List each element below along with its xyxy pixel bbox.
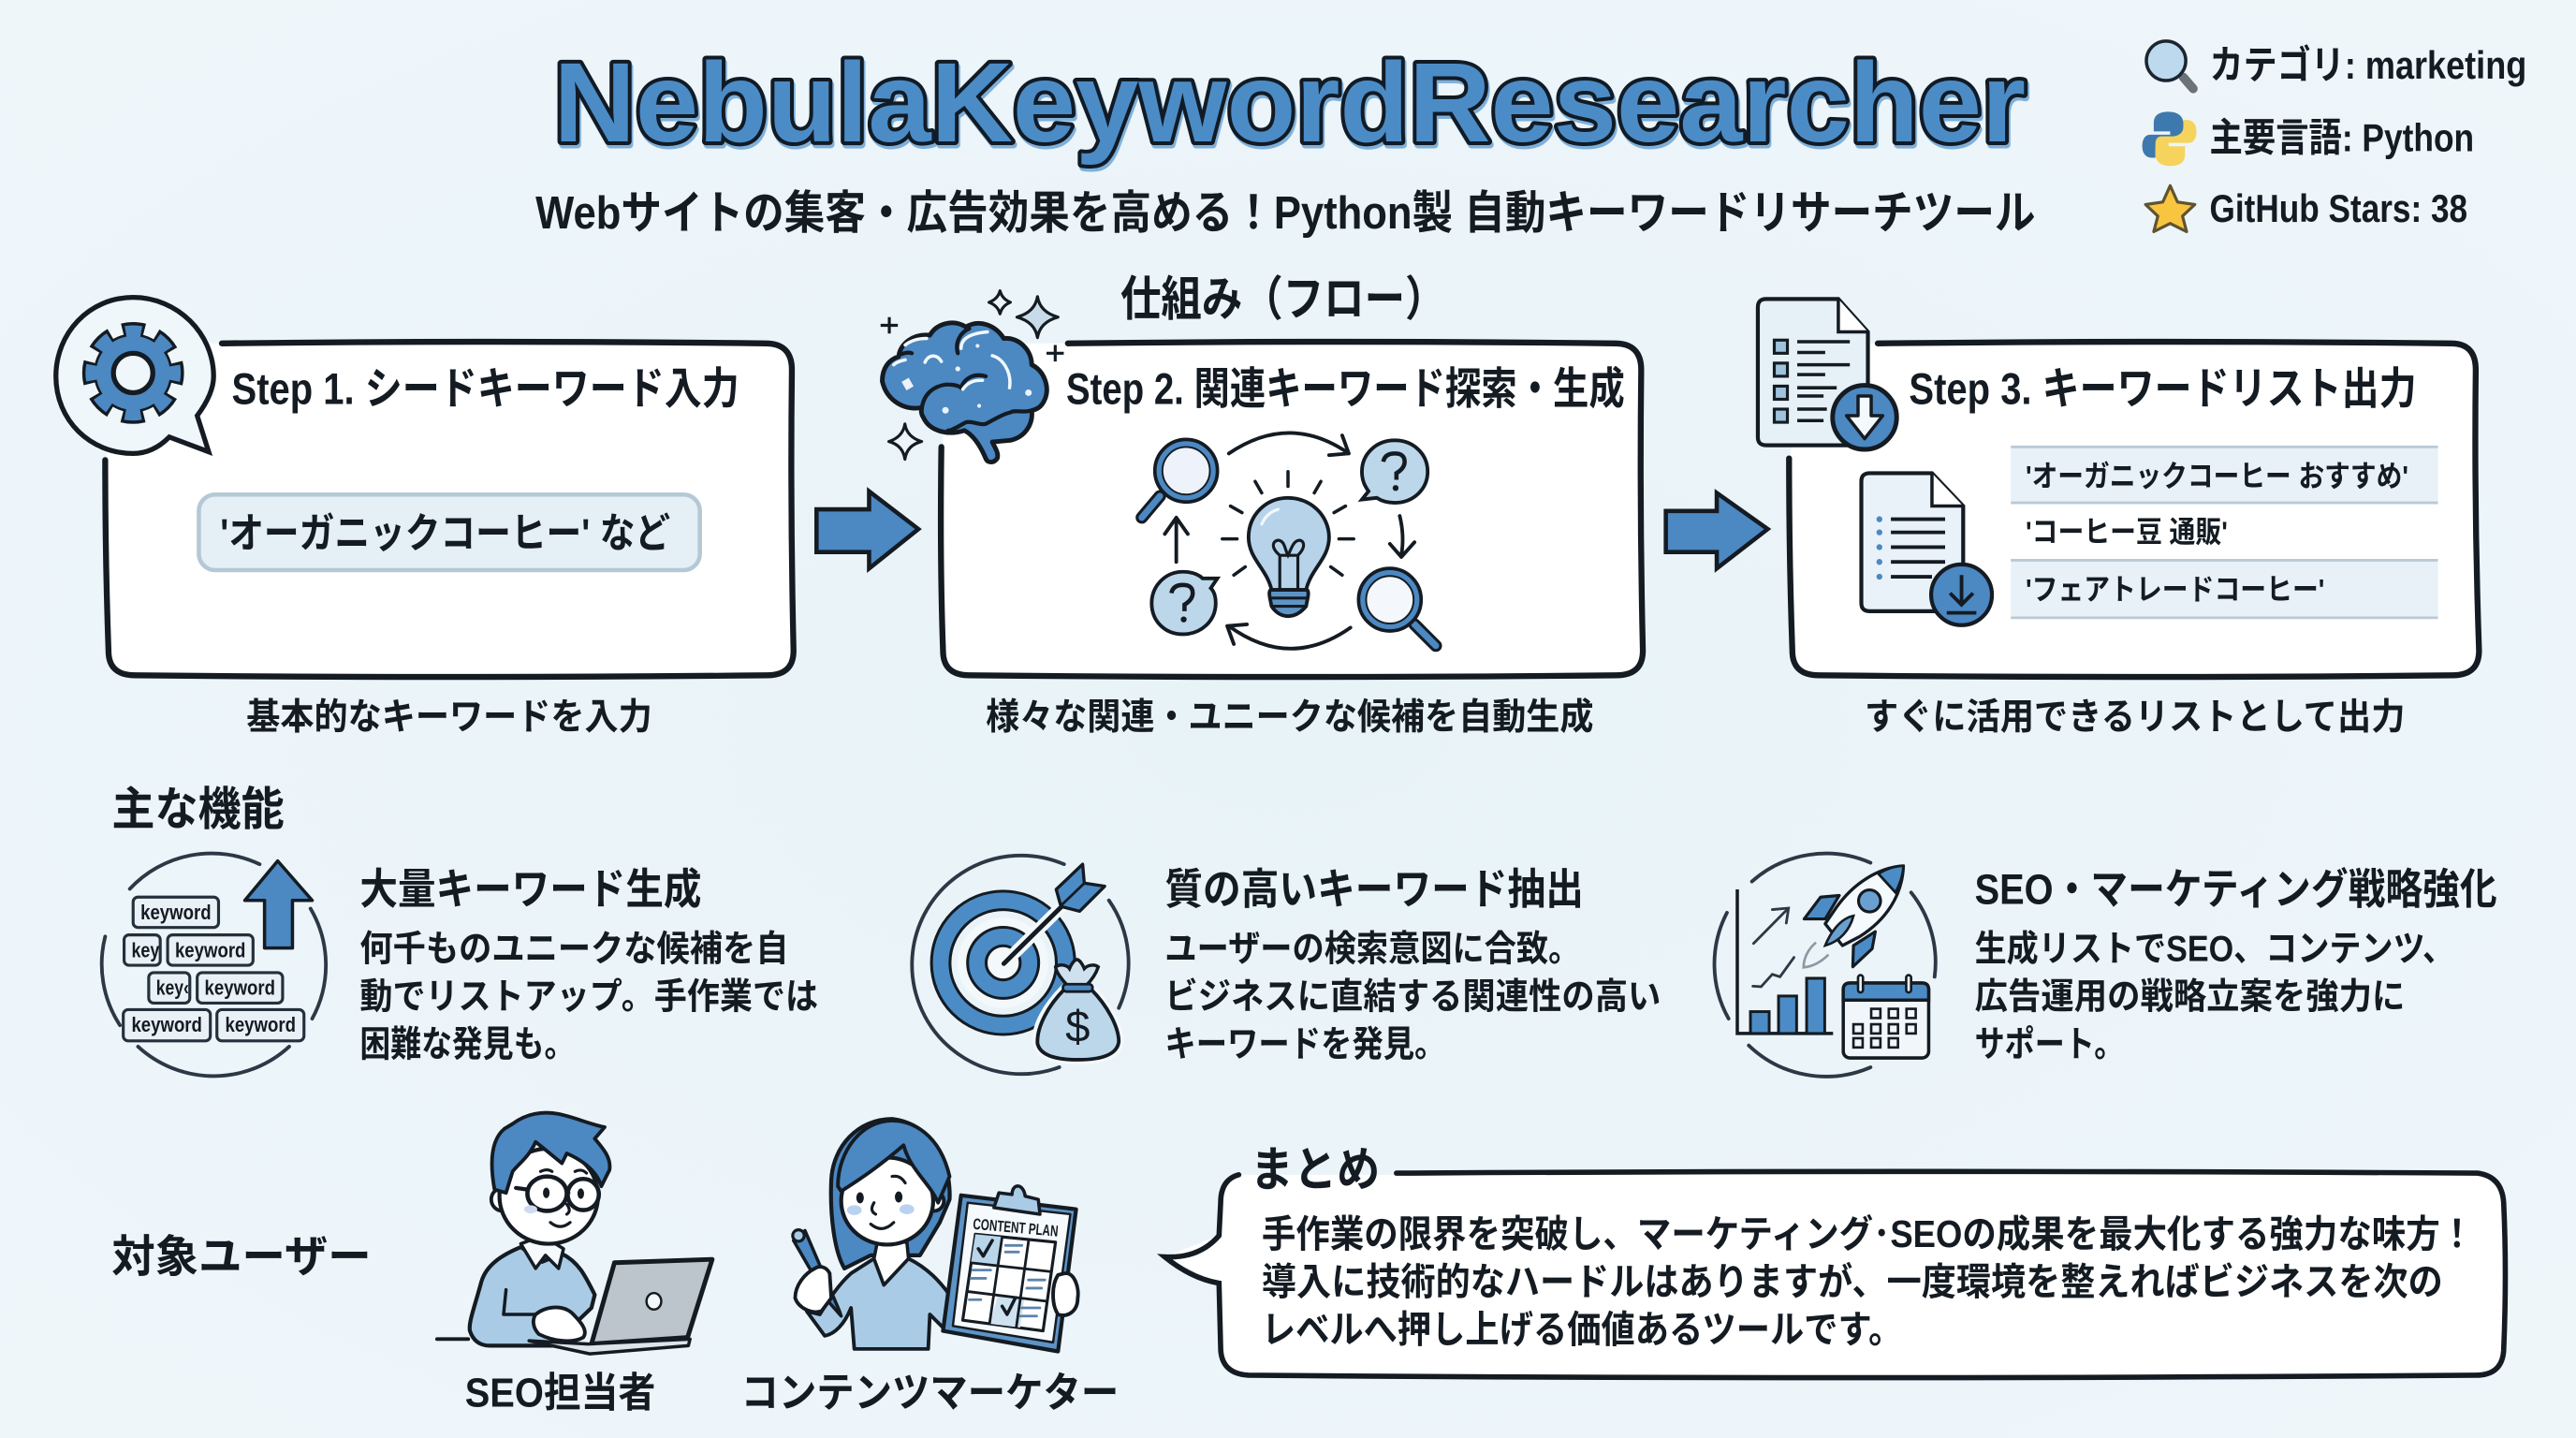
title: NebulaKeywordResearcher [554,38,2026,166]
feature text: ビジネスに直結する関連性の高い [1164,977,1661,1018]
summary heading: まとめ [1251,1143,1380,1196]
caption: step 3: すぐに活用できるリストとして出力 [1865,697,2405,738]
icon: brain [883,323,1046,462]
illustration: content marketer [793,1119,1078,1352]
diagram: keyword discovery loop [1142,433,1436,649]
icon: star [2145,185,2195,231]
arrow [1666,493,1767,568]
feature text: 何千ものユニークな候補を自 [359,930,788,970]
icon: question bottom [1151,572,1218,634]
feature text: キーワードを発見。 [1164,1024,1445,1064]
feature heading: 大量キーワード生成 [359,865,701,913]
feature text: サポート。 [1975,1024,2124,1064]
illustration: SEO person [437,1113,712,1354]
feature: bulk generation [102,854,818,1076]
feature text [1975,930,2454,1064]
caption: step 1: 基本的なキーワードを入力 [246,697,652,738]
subtitle: Webサイトの集客・広告効果を高める！Python製 自動キーワードリサーチツール [535,188,2036,239]
step 3 heading: Step 3. キーワードリスト出力 [1909,365,2417,415]
icon: python [2143,111,2197,166]
loop arrows [1164,433,1414,649]
icon: gear bubble [56,298,213,453]
flow heading: 仕組み（フロー） [1120,272,1445,326]
summary text: レベルへ押し上げる価値あるツールです。 [1262,1308,1902,1351]
step 2 heading: Step 2. 関連キーワード探索・生成 [1066,365,1625,415]
panel: step 2 [881,291,1643,677]
summary text: 手作業の限界を突破し、マーケティング･SEOの成果を最大化する強力な味方！ [1262,1212,2474,1255]
icon: keyword chips: keyword [205,976,275,1000]
icon: document with download [1758,299,1896,449]
feature text: 困難な発見も。 [359,1024,575,1064]
keyword list: 'オーガニックコーヒー おすすめ' [2026,459,2408,492]
icon: keyword chips: keyword [225,1013,296,1036]
illustration: content marketer: CONTENT PLAN [973,1215,1059,1240]
arrow [816,492,918,568]
feature text: 動でリストアップ。手作業では [359,977,818,1018]
icon: magnifier [2146,41,2193,89]
summary text [1262,1212,2474,1351]
feature: quality extraction [912,856,1661,1074]
label: content marketer: コンテンツマーケター [741,1370,1119,1416]
panel: step 1 [56,298,794,677]
meta info [2143,41,2526,231]
icon: rocket chart calendar [1715,854,1936,1077]
feature heading: SEO・マーケティング戦略強化 [1975,865,2497,913]
target users heading: 対象ユーザー [111,1232,372,1282]
feature text: 広告運用の戦略立案を強力に [1975,977,2405,1018]
icon: magnifier top [1142,443,1214,518]
icon: sparkles [881,291,1063,460]
icon: target and money bag: $ [1065,1003,1090,1052]
feature heading: 質の高いキーワード抽出 [1164,865,1584,913]
feature text: ユーザーの検索意図に合致。 [1164,930,1580,970]
caption: step 2: 様々な関連・ユニークな候補を自動生成 [986,697,1593,738]
panel: step 3 [1758,299,2479,677]
stars label: GitHub Stars: 38 [2210,186,2467,230]
language label: 主要言語: Python [2210,115,2474,159]
input example [198,494,700,570]
input example: 'オーガニックコーヒー' など [220,510,670,556]
feature text: 生成リストでSEO、コンテンツ、 [1975,930,2454,970]
keyword list: 'コーヒー豆 通販' [2026,515,2228,549]
feature: strategy [1715,854,2497,1077]
icon: keyword chips [102,854,326,1076]
summary text: 導入に技術的なハードルはありますが、一度環境を整えればビジネスを次の [1262,1260,2443,1303]
icon: magnifier bottom [1362,572,1436,646]
icon: list document [1862,473,1992,625]
keyword list: 'フェアトレードコーヒー' [2026,573,2324,607]
feature text [359,930,818,1064]
icon: keyword chips: keyword [131,1013,202,1036]
category label: カテゴリ: marketing [2210,43,2526,87]
label: SEO person: SEO担当者 [465,1370,655,1416]
icon: light bulb [1222,472,1354,616]
icon: keyword chips: keyword [175,938,245,961]
features heading: 主な機能 [111,785,285,835]
summary callout [1164,1143,2505,1378]
icon: keyword chips: key‹ [156,976,189,1000]
icon: target and money bag [912,856,1129,1074]
feature text [1164,930,1661,1064]
keyword list [2011,447,2438,618]
icon: keyword chips: keyword [140,901,212,924]
icon: keyword chips: key [131,938,160,961]
icon: question top [1362,440,1427,503]
step 1 heading: Step 1. シードキーワード入力 [232,365,739,415]
